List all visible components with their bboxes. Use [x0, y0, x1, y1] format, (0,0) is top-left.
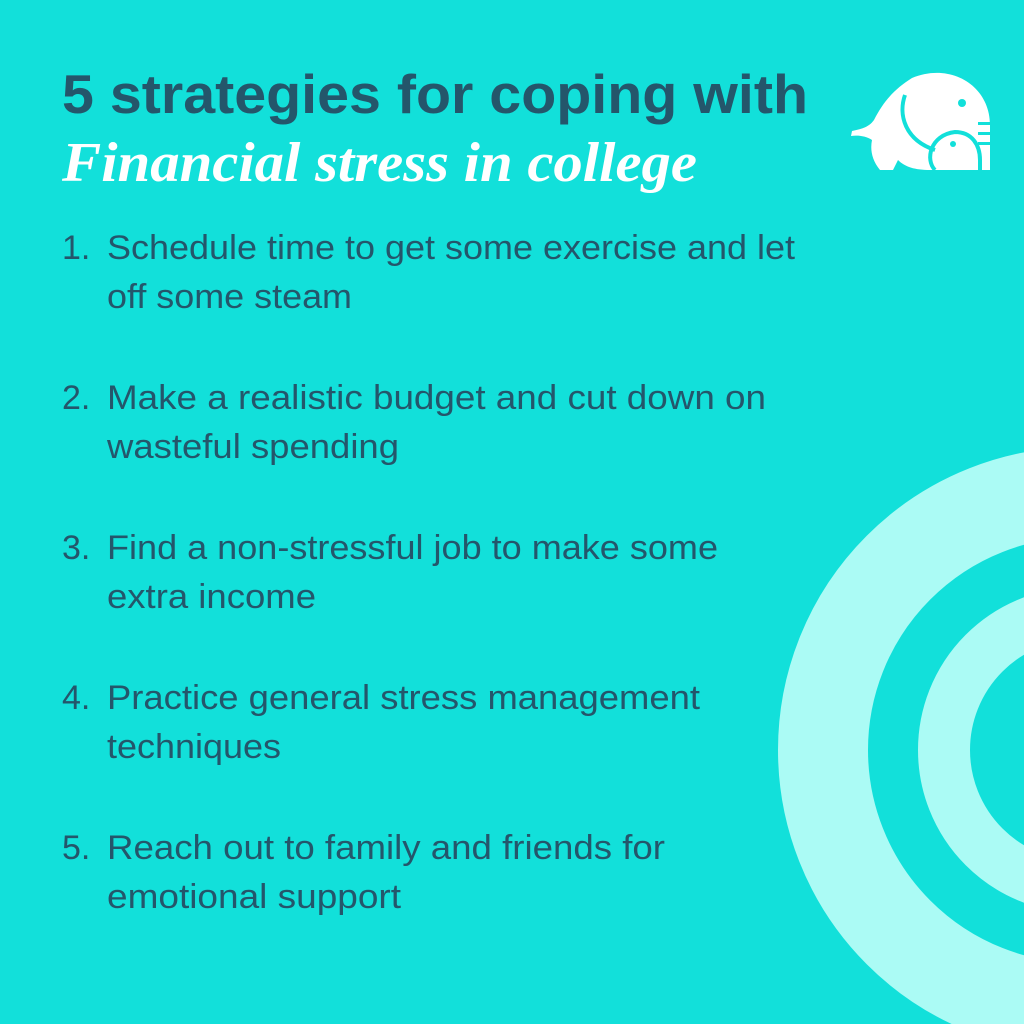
- item 3: extra income: [107, 578, 316, 616]
- item 4: 4.: [62, 679, 90, 717]
- title: [61, 63, 808, 194]
- item 2: wasteful spending: [106, 428, 399, 466]
- title: 5 strategies for coping with: [62, 63, 808, 125]
- title: Financial stress in college: [61, 132, 697, 194]
- item 2: 2.: [62, 379, 90, 417]
- item 2: [62, 379, 766, 466]
- item 5: 5.: [62, 829, 90, 867]
- item 1: off some steam: [107, 278, 352, 316]
- item 4: techniques: [107, 728, 281, 766]
- icon: elephant logo: [851, 73, 990, 170]
- item 3: 3.: [62, 529, 90, 567]
- item 3: Find a non-stressful job to make some: [107, 529, 718, 567]
- item 1: [62, 229, 796, 316]
- item 5: Reach out to family and friends for: [107, 829, 665, 867]
- item 4: [62, 679, 701, 766]
- decorative rings: [823, 492, 1024, 1008]
- item 5: [62, 829, 665, 916]
- list of strategies: [62, 229, 796, 916]
- item 1: 1.: [62, 229, 90, 267]
- item 4: Practice general stress management: [107, 679, 701, 717]
- item 5: emotional support: [107, 878, 402, 916]
- item 1: Schedule time to get some exercise and let: [107, 229, 796, 267]
- item 2: Make a realistic budget and cut down on: [107, 379, 766, 417]
- item 3: [62, 529, 718, 616]
